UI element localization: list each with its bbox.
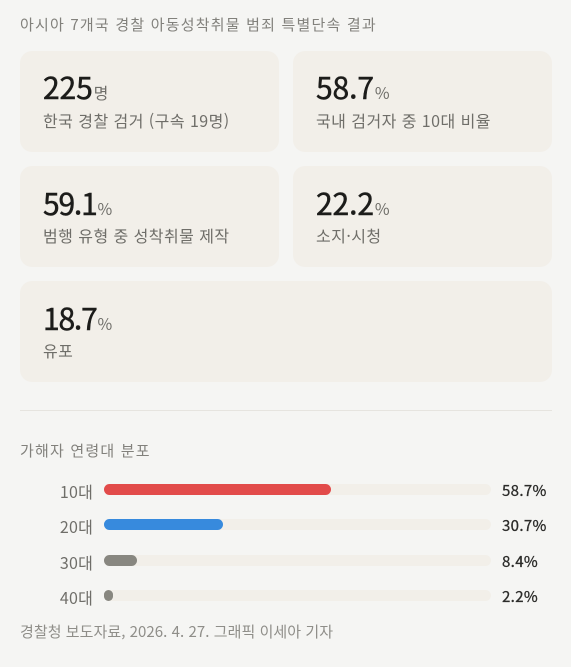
heading: age distribution: 가해자 연령대 분포 — [20, 440, 151, 461]
bar row: 30s — [60, 550, 538, 574]
panel: teen share — [293, 51, 552, 152]
panel: possession share — [293, 166, 552, 267]
bar row: 40s — [60, 585, 538, 609]
panel: production share — [20, 166, 279, 267]
panel: 225 arrested: 225명 — [43, 64, 108, 108]
bar row: 40s: 2.2% — [502, 586, 538, 607]
panel: 225 arrested: 한국 경찰 검거 (구속 19명) — [43, 108, 230, 132]
source note: 경찰청 보도자료, 2026. 4. 27. 그래픽 이세아 기자 — [20, 621, 333, 642]
bar row: 30s: 30대 — [60, 550, 93, 574]
bar row: 20s: 30.7% — [502, 515, 547, 536]
panel: distribution share: 18.7% — [43, 295, 112, 339]
bar row: 10s — [60, 479, 547, 503]
panel: teen share: 58.7% — [316, 64, 390, 108]
bar row: 30s: 8.4% — [502, 551, 538, 572]
panel: possession share: 22.2% — [316, 180, 390, 224]
bar row: 40s: 40대 — [60, 585, 93, 609]
bar row: 20s: 20대 — [60, 514, 93, 538]
panel: distribution share: 유포 — [43, 338, 73, 362]
bar row: 10s: 58.7% — [502, 480, 547, 501]
bar chart: age distribution — [60, 479, 547, 609]
bar row: 10s: 10대 — [60, 479, 93, 503]
panel: possession share: 소지·시청 — [316, 223, 382, 247]
panel: production share: 범행 유형 중 성착취물 제작 — [43, 223, 230, 247]
title: 아시아 7개국 경찰 아동성착취물 범죄 특별단속 결과 — [20, 14, 377, 35]
panel: teen share: 국내 검거자 중 10대 비율 — [316, 108, 491, 132]
panel: 225 arrested — [20, 51, 279, 152]
bar row: 20s — [60, 514, 547, 538]
panel: distribution share — [20, 281, 552, 382]
panel: production share: 59.1% — [43, 180, 112, 224]
